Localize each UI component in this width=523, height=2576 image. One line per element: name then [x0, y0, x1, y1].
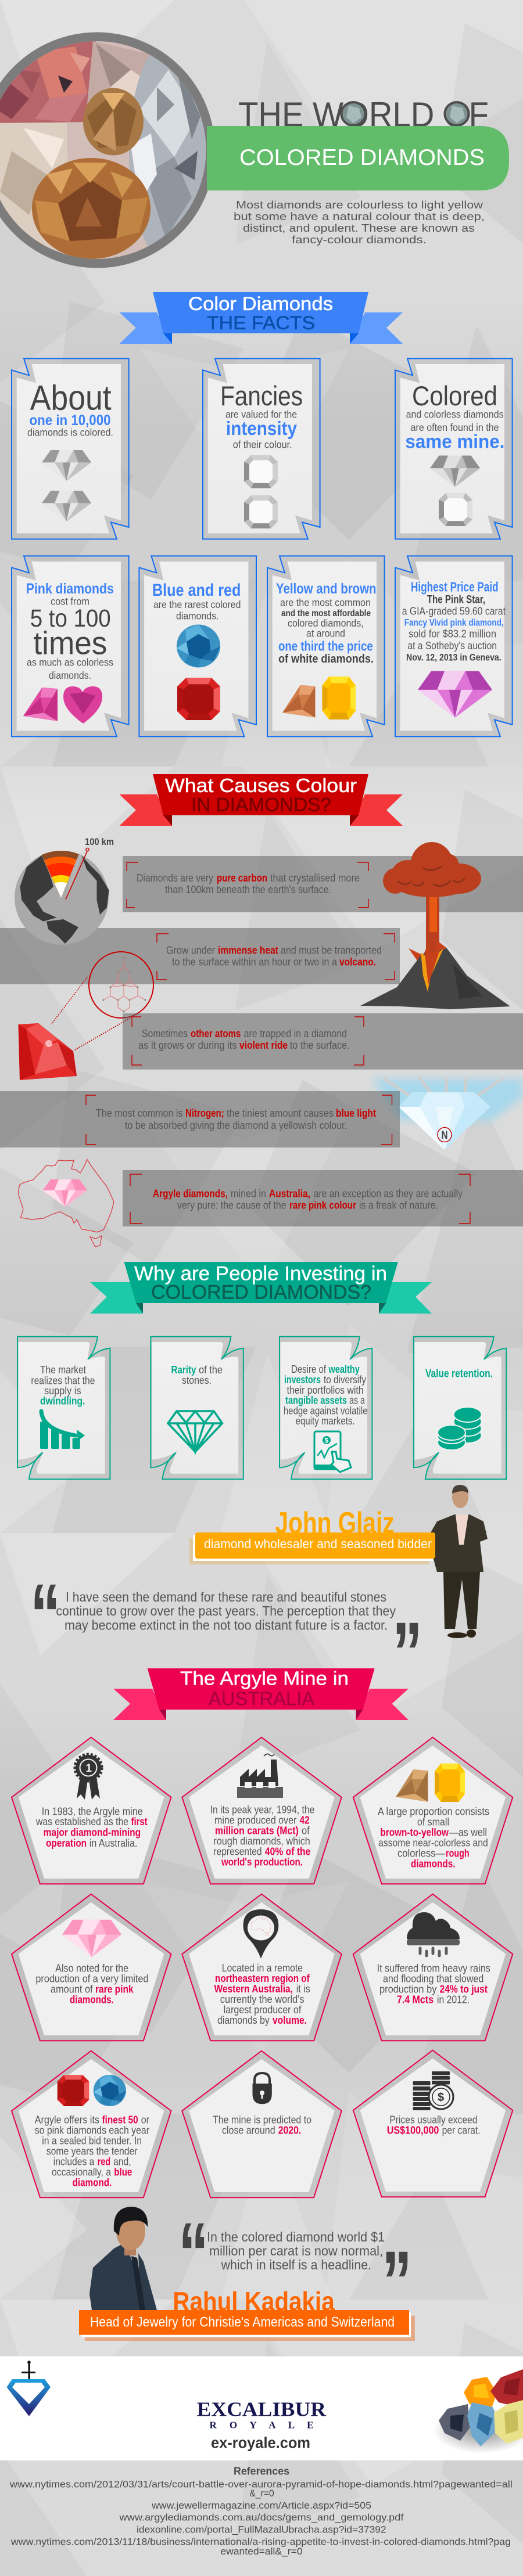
mine card: Western Australia: northeastern region of [215, 1973, 310, 1984]
investing card: wealthy investors: hedge against volatile [284, 1405, 367, 1417]
investing card: wealthy investors [280, 1337, 372, 1479]
mine card: finest 50 tender: in a sealed bid tender. In [42, 2135, 142, 2147]
John Glaiz name and title: John Glaiz [275, 1506, 394, 1540]
fact card: highest price paid [395, 556, 513, 736]
mine card: established 1983: in Australia. [89, 1837, 137, 1849]
fact card: yellow and brown: colored diamonds, [288, 617, 364, 629]
mine card: finest 50 tender: Argyle offers its [35, 2114, 99, 2126]
mine card: heavy rains: 24% to just [439, 1984, 488, 1995]
icon: phone with chart [314, 1431, 351, 1472]
investing card: wealthy investors: Desire of [291, 1363, 327, 1375]
mine card: finest 50 tender [12, 2051, 171, 2197]
quote: Rahul Kadakia: which in itself is a headline. [221, 2257, 371, 2272]
fact card: same mine [395, 358, 513, 539]
icon: red gem [19, 1023, 77, 1080]
mine card: rare pink diamonds: diamonds. [70, 1994, 114, 2006]
mine card: mine closing: The mine is predicted to [213, 2114, 311, 2126]
icon: diamond inside O of OF [445, 102, 468, 125]
mine card: mine closing: close around [222, 2125, 275, 2136]
panel: immense heat: volcano. [339, 956, 376, 968]
investing card: rarity: Rarity [171, 1363, 196, 1376]
fact card: one in 10,000: one in 10,000 [29, 412, 110, 429]
fact card: one in 10,000: About [30, 379, 112, 418]
panel: nitrogen: blue light [336, 1107, 376, 1119]
icon: emerald cut stones [244, 455, 278, 528]
logo: Excalibur Royale [197, 2398, 327, 2431]
mine card: finest 50 tender: red [98, 2156, 110, 2168]
mine card: rare pink diamonds: production of a very limited [35, 1973, 148, 1985]
fact card: pink diamonds: Pink diamonds [26, 581, 114, 597]
panel: immense heat: and must be transported [281, 944, 382, 956]
references: www.jewellermagazine.com/Article.aspx?id=505 [151, 2500, 371, 2511]
nitrogen marker: N [442, 1129, 447, 1142]
panel: Argyle diamonds: very pure; the cause of the [177, 1199, 286, 1211]
nitrogen marker [438, 1128, 452, 1142]
panel: pure carbon [123, 856, 523, 912]
mine card: brown-to-yellow [353, 1737, 513, 1884]
investing card: wealthy investors: to diversify [324, 1373, 367, 1386]
panel: pure carbon: Diamonds are very [137, 872, 214, 884]
mine card: mine closing: 2020. [278, 2125, 301, 2136]
panel: other atoms: are trapped in a diamond [244, 1027, 347, 1039]
fact card: highest price paid: sold for $83.2 million [409, 628, 496, 640]
mine card: brown-to-yellow: of small [417, 1816, 449, 1828]
panel: Argyle diamonds: are an exception as they are actually [314, 1188, 463, 1200]
panel: pure carbon: that crystallised more [270, 872, 360, 884]
icon: blue-glow nitrogen diamond [372, 1077, 523, 1150]
mine card: finest 50 tender: and, [113, 2156, 131, 2168]
references: www.argylediamonds.com.au/docs/gems_and_gemology.pdf [119, 2512, 404, 2523]
mine card: heavy rains: production by [379, 1984, 436, 1995]
investing card: dwindling supply [17, 1337, 110, 1479]
ribbon heading: What Causes Colour in Diamonds: What Causes Colour [165, 775, 357, 796]
fact card: pink diamonds: diamonds. [49, 670, 91, 681]
icon: blue and red gems [177, 625, 220, 720]
mine card: Western Australia: largest producer of [224, 2004, 302, 2016]
panel: nitrogen: the tiniest amount causes [227, 1107, 334, 1119]
ribbon heading: Why are People Investing [90, 1262, 432, 1314]
mine card: peak year 1994: 40% of the [265, 1845, 310, 1857]
panel: nitrogen: The most common is [96, 1107, 183, 1119]
photo: John Glaiz [428, 1485, 488, 1638]
mine card: price per carat: per carat. [442, 2125, 481, 2136]
mine card: established 1983: major diamond-mining [44, 1827, 141, 1839]
icon: coins with dollar [413, 2071, 453, 2110]
mine card: rare pink diamonds: Also noted for the [55, 1963, 128, 1974]
ribbon heading: Color Diamonds The Facts: Color Diamonds [188, 293, 333, 314]
mine card: Western Australia [182, 1894, 342, 2041]
mine card: rare pink diamonds: rare pink [95, 1984, 134, 1995]
mine card: Western Australia: volume. [273, 2014, 307, 2026]
panel: pure carbon: pure carbon [217, 872, 267, 884]
mine card: peak year 1994: represented [213, 1845, 262, 1857]
fact card: fancies [203, 358, 320, 539]
investing card: dwindling supply: The market [40, 1363, 86, 1376]
Rahul Kadakia name and title: Head of Jewelry for Christie's Americas and Switzerland [90, 2315, 395, 2330]
investing card: value retention [414, 1337, 506, 1479]
references: www.nytimes.com/2012/03/31/arts/court-battle-over-aurora-pyramid-of-hope-diamonds.html?pagewanted=all [9, 2478, 513, 2489]
fact card: same mine: same mine. [405, 431, 504, 452]
fact card: highest price paid: a GIA-graded 59.60 carat [402, 605, 506, 617]
icon: volcano eruption [360, 842, 510, 1009]
investing card: wealthy investors: investors [284, 1373, 321, 1386]
panel: immense heat: to the surface within an hour or two in a [172, 956, 338, 968]
references: ewanted=all&_r=0 [220, 2546, 303, 2557]
mine card: Western Australia: diamonds by [217, 2014, 270, 2026]
intro paragraph: fancy-colour diamonds. [292, 234, 427, 246]
fact card: one in 10,000 [12, 358, 129, 539]
icon: factory [237, 1754, 283, 1798]
fact card: fancies: of their colour. [233, 439, 292, 451]
logo: Excalibur Royale: EXCALIBUR [197, 2398, 327, 2421]
logo: sword and diamond [7, 2361, 51, 2416]
investing card: rarity: of the [199, 1363, 223, 1376]
fact card: fancies: Fancies [220, 380, 303, 411]
mine card: peak year 1994: world's production. [221, 1856, 303, 1868]
quote: Rahul Kadakia [178, 2204, 412, 2330]
intro paragraph: distinct, and opulent. These are known as [243, 222, 475, 234]
fact card: yellow and brown: Yellow and brown [276, 581, 377, 597]
mine card: brown-to-yellow: assome near-colorless and [378, 1837, 488, 1849]
mine card: peak year 1994: million carats (Mct) [215, 1825, 299, 1836]
mine card: rare pink diamonds [12, 1894, 171, 2041]
panel: other atoms: to the surface. [290, 1039, 350, 1051]
panel: other atoms: Sometimes [142, 1027, 188, 1039]
investing card: rarity: stones. [182, 1374, 212, 1386]
fact card: highest price paid: Nov. 12, 2013 in Geneva. [406, 652, 501, 663]
fact card: yellow and brown: at around [306, 627, 345, 639]
quote: John Glaiz [30, 1566, 422, 1701]
panel: Argyle diamonds: mined in [231, 1188, 266, 1200]
fact card: highest price paid: at a Sotheby's auction [407, 640, 497, 652]
mine card: finest 50 tender: includes a [53, 2156, 95, 2168]
mine card: heavy rains: in 2012. [437, 1994, 470, 2006]
quote: John Glaiz: “ [30, 1566, 60, 1663]
panel: Argyle diamonds: is a freak of nature. [359, 1199, 438, 1211]
ribbon heading: Why are People Investing: Why are People Investing in [134, 1263, 387, 1285]
panel: pure carbon: than 100km beneath the earth's surface. [165, 883, 331, 895]
panel: other atoms: as it grows or during its [138, 1039, 237, 1051]
investing card: wealthy investors: equity markets. [296, 1415, 355, 1427]
quote: Rahul Kadakia: million per carat is now normal, [209, 2243, 383, 2258]
ribbon heading: The Argyle Mine in Australia: AUSTRALIA [209, 1688, 314, 1710]
quote: John Glaiz: I have seen the demand for these rare and beautiful stones [66, 1589, 386, 1604]
icon: declining bar chart [40, 1411, 85, 1449]
ribbon heading: Why are People Investing: COLORED DIAMONDS? [151, 1282, 371, 1304]
icon: phone with chart: $ [324, 1437, 329, 1445]
panel: Argyle diamonds: Australia, [269, 1188, 310, 1200]
mine card: established 1983: was established as the [35, 1816, 128, 1827]
fact card: pink diamonds: as much as colorless [27, 656, 113, 668]
fact card: yellow and brown: one third the price [278, 638, 373, 653]
ribbon heading: The Argyle Mine in Australia [113, 1668, 409, 1720]
mine card: peak year 1994: rough diamonds, which [213, 1835, 310, 1847]
fact card: yellow and brown [267, 556, 385, 736]
investing card: wealthy investors: as a [349, 1394, 366, 1406]
references: www.nytimes.com/2013/11/18/business/international/a-rising-appetite-to-invest-in-colored-diamonds.html?pag [10, 2537, 511, 2548]
website: ex-royale.com [211, 2434, 310, 2452]
icon: coin stacks [438, 1407, 482, 1450]
ribbon heading: Color Diamonds The Facts: THE FACTS [207, 312, 315, 333]
quote: John Glaiz: may become extinct in the not too distant future is a factor. [65, 1618, 388, 1633]
title banner: Colored Diamonds [207, 126, 509, 190]
title banner: Colored Diamonds: COLORED DIAMONDS [239, 145, 485, 170]
investing card: wealthy investors: their portfolios with [287, 1384, 364, 1396]
mine card: established 1983: operation [46, 1837, 87, 1849]
references: idexonline.com/portal_FullMazalUbracha.asp?id=37392 [137, 2524, 386, 2535]
panel: nitrogen: to be absorbed giving the diamond a yellowish colour. [125, 1119, 347, 1131]
mine card: established 1983: In 1983, the Argyle mine [42, 1806, 143, 1818]
icon: carbon lattice in circle [52, 952, 153, 1050]
panel: other atoms: other atoms [191, 1027, 241, 1039]
quote: Rahul Kadakia: ” [382, 2233, 412, 2330]
mine card: price per carat: US$100,000 [387, 2125, 439, 2136]
investing card: rarity [151, 1337, 243, 1479]
quote: Rahul Kadakia: “ [178, 2204, 209, 2302]
icon: brown and yellow gems [396, 1764, 465, 1802]
fact card: pink diamonds: 5 to 100 [30, 605, 111, 632]
mine card: brown-to-yellow: colorless— [397, 1848, 445, 1859]
mine card: peak year 1994: In its peak year, 1994, the [210, 1804, 314, 1815]
ribbon heading: The Argyle Mine in Australia: The Argyle Mine in [180, 1668, 349, 1689]
mine card: Western Australia: currently the world's [220, 1994, 305, 2005]
fact card: fancies: are valued for the [225, 408, 297, 420]
investing card: dwindling supply: realizes that the [31, 1374, 95, 1386]
mine card: peak year 1994 [182, 1737, 342, 1884]
footer band [0, 2356, 523, 2460]
intro paragraph: Most diamonds are colourless to light yellow [236, 199, 483, 211]
references: &_r=0 [249, 2488, 274, 2499]
quote: John Glaiz: continue to grow over the past years. The perception that they [56, 1603, 396, 1618]
quote: John Glaiz: ” [392, 1604, 422, 1701]
icon: padlock [252, 2073, 272, 2104]
mine card: heavy rains [353, 1894, 513, 2041]
mine card: brown-to-yellow: rough [446, 1848, 470, 1859]
icon: map pin with Australia [243, 1909, 278, 1959]
mine card: price per carat: Prices usually exceed [389, 2114, 477, 2126]
mine card: finest 50 tender: finest 50 [102, 2114, 138, 2126]
icon: coins with dollar: $ [438, 2091, 444, 2104]
mine card: established 1983 [12, 1737, 171, 1884]
panel: immense heat: Grow under [166, 944, 215, 956]
mine card: brown-to-yellow: brown-to-yellow [380, 1827, 449, 1839]
icon: diamond outline [168, 1411, 222, 1452]
John Glaiz name and title: diamond wholesaler and seasoned bidder [204, 1537, 432, 1551]
fact card: fancies: intensity [226, 418, 298, 439]
panel: other atoms: violent ride [239, 1039, 288, 1051]
fact card: pink diamonds: times [33, 625, 107, 661]
mine card: rare pink diamonds: amount of [51, 1984, 93, 1995]
mine card: Western Australia: Located in a remote [222, 1962, 303, 1974]
icon: pink gems [23, 686, 102, 724]
icon: award ribbon: 1 [86, 1762, 92, 1775]
icon: diamond inside O of WORLD [342, 102, 365, 125]
icon: pink diamond [62, 1920, 121, 1957]
mine card: brown-to-yellow: —as well [449, 1827, 487, 1839]
Rahul Kadakia name and title [79, 2286, 415, 2341]
mine card: finest 50 tender: so pink diamonds each year [35, 2125, 149, 2136]
icon: rain cloud [407, 1912, 460, 1956]
panel: Argyle diamonds: rare pink colour [289, 1199, 356, 1211]
fact card: blue and red: diamonds. [176, 610, 218, 621]
Rahul Kadakia name and title: Rahul Kadakia [173, 2286, 335, 2316]
icon: diamond and emerald cut [430, 455, 480, 526]
fact card: blue and red: are the rarest colored [153, 599, 241, 610]
icon: brown and yellow gems [282, 677, 356, 719]
depth label: 100 km [85, 836, 114, 847]
mine card: finest 50 tender: or [141, 2114, 149, 2126]
fact card: blue and red [139, 556, 256, 736]
panel: immense heat: immense heat [218, 944, 278, 956]
investing card: value retention: Value retention. [425, 1368, 493, 1380]
image: coloured gems [433, 2369, 523, 2453]
panel: Argyle diamonds [123, 1170, 523, 1226]
icon: pink star diamond [418, 671, 492, 718]
icon: Australia map with pink diamond [19, 1160, 114, 1247]
mine card: finest 50 tender: diamond. [73, 2177, 112, 2189]
mine card: heavy rains: 7.4 Mcts [397, 1994, 434, 2006]
hero image: colored diamonds circle [0, 33, 215, 268]
mine card: finest 50 tender: blue [114, 2167, 132, 2178]
panel: nitrogen [0, 1091, 400, 1147]
mine card: peak year 1994: mine produced over [214, 1814, 296, 1826]
panel: Argyle diamonds: Argyle diamonds, [153, 1188, 228, 1200]
mine card: heavy rains: It suffered from heavy rains [377, 1963, 490, 1974]
icon: red and blue gems [58, 2075, 126, 2106]
fact card: yellow and brown: and the most affordable [281, 609, 371, 618]
fact card: same mine: Colored [412, 380, 497, 411]
fact card: blue and red: Blue and red [152, 581, 241, 600]
fact card: pink diamonds [12, 556, 129, 736]
mine card: established 1983: first [131, 1816, 148, 1827]
John Glaiz name and title [189, 1506, 435, 1564]
fact card: same mine: are often found in the [411, 422, 499, 433]
logo: Excalibur Royale: R O Y A L E [209, 2420, 314, 2431]
investing card: wealthy investors: wealthy [328, 1363, 360, 1375]
fact card: same mine: and colorless diamonds [406, 408, 504, 420]
references [9, 2466, 513, 2557]
mine card: mine closing [182, 2051, 342, 2197]
panel: immense heat [0, 928, 400, 984]
mine card: brown-to-yellow: A large proportion consists [378, 1806, 489, 1818]
ribbon heading: Color Diamonds The Facts [120, 292, 403, 344]
title: The World of: THE WORLD OF [238, 95, 489, 134]
ribbon heading: What Causes Colour in Diamonds [120, 774, 403, 826]
mine card: heavy rains: and flooding that slowed [383, 1973, 483, 1985]
quote: Rahul Kadakia: In the colored diamond world $1 [207, 2229, 385, 2244]
fact card: yellow and brown: of white diamonds. [278, 653, 374, 665]
mine card: peak year 1994: 42 [300, 1814, 310, 1826]
ribbon heading: What Causes Colour in Diamonds: IN DIAMONDS? [191, 794, 331, 815]
mine card: peak year 1994: of [302, 1825, 310, 1836]
fact card: yellow and brown: are the most common [280, 597, 371, 609]
investing card: wealthy investors: tangible assets [285, 1394, 347, 1406]
mine card: Western Australia: it is [296, 1983, 310, 1995]
mine card: finest 50 tender: some years the tender [46, 2146, 137, 2157]
mine card: brown-to-yellow: diamonds. [411, 1858, 456, 1870]
mine card: price per carat [353, 2050, 513, 2197]
photo: Rahul Kadakia [89, 2207, 157, 2310]
fact card: one in 10,000: diamonds is colored. [27, 426, 113, 438]
icon: earth cross-section [14, 836, 114, 945]
mine card: Western Australia: Western Australia, [214, 1983, 293, 1995]
intro paragraph [234, 199, 485, 246]
fact card: highest price paid: The Pink Star, [427, 594, 485, 606]
panel: other atoms [123, 1013, 523, 1070]
mine card: finest 50 tender: occasionally, a [52, 2167, 112, 2178]
references: References [234, 2466, 289, 2477]
intro paragraph: but some have a natural colour that is deep, [234, 211, 485, 222]
investing card: dwindling supply: supply is [44, 1384, 81, 1397]
icon: diamonds [42, 450, 91, 521]
icon: award ribbon [75, 1754, 102, 1800]
investing card: dwindling supply: dwindling. [40, 1394, 85, 1406]
panel: nitrogen: Nitrogen; [185, 1107, 224, 1119]
fact card: pink diamonds: cost from [51, 596, 89, 607]
